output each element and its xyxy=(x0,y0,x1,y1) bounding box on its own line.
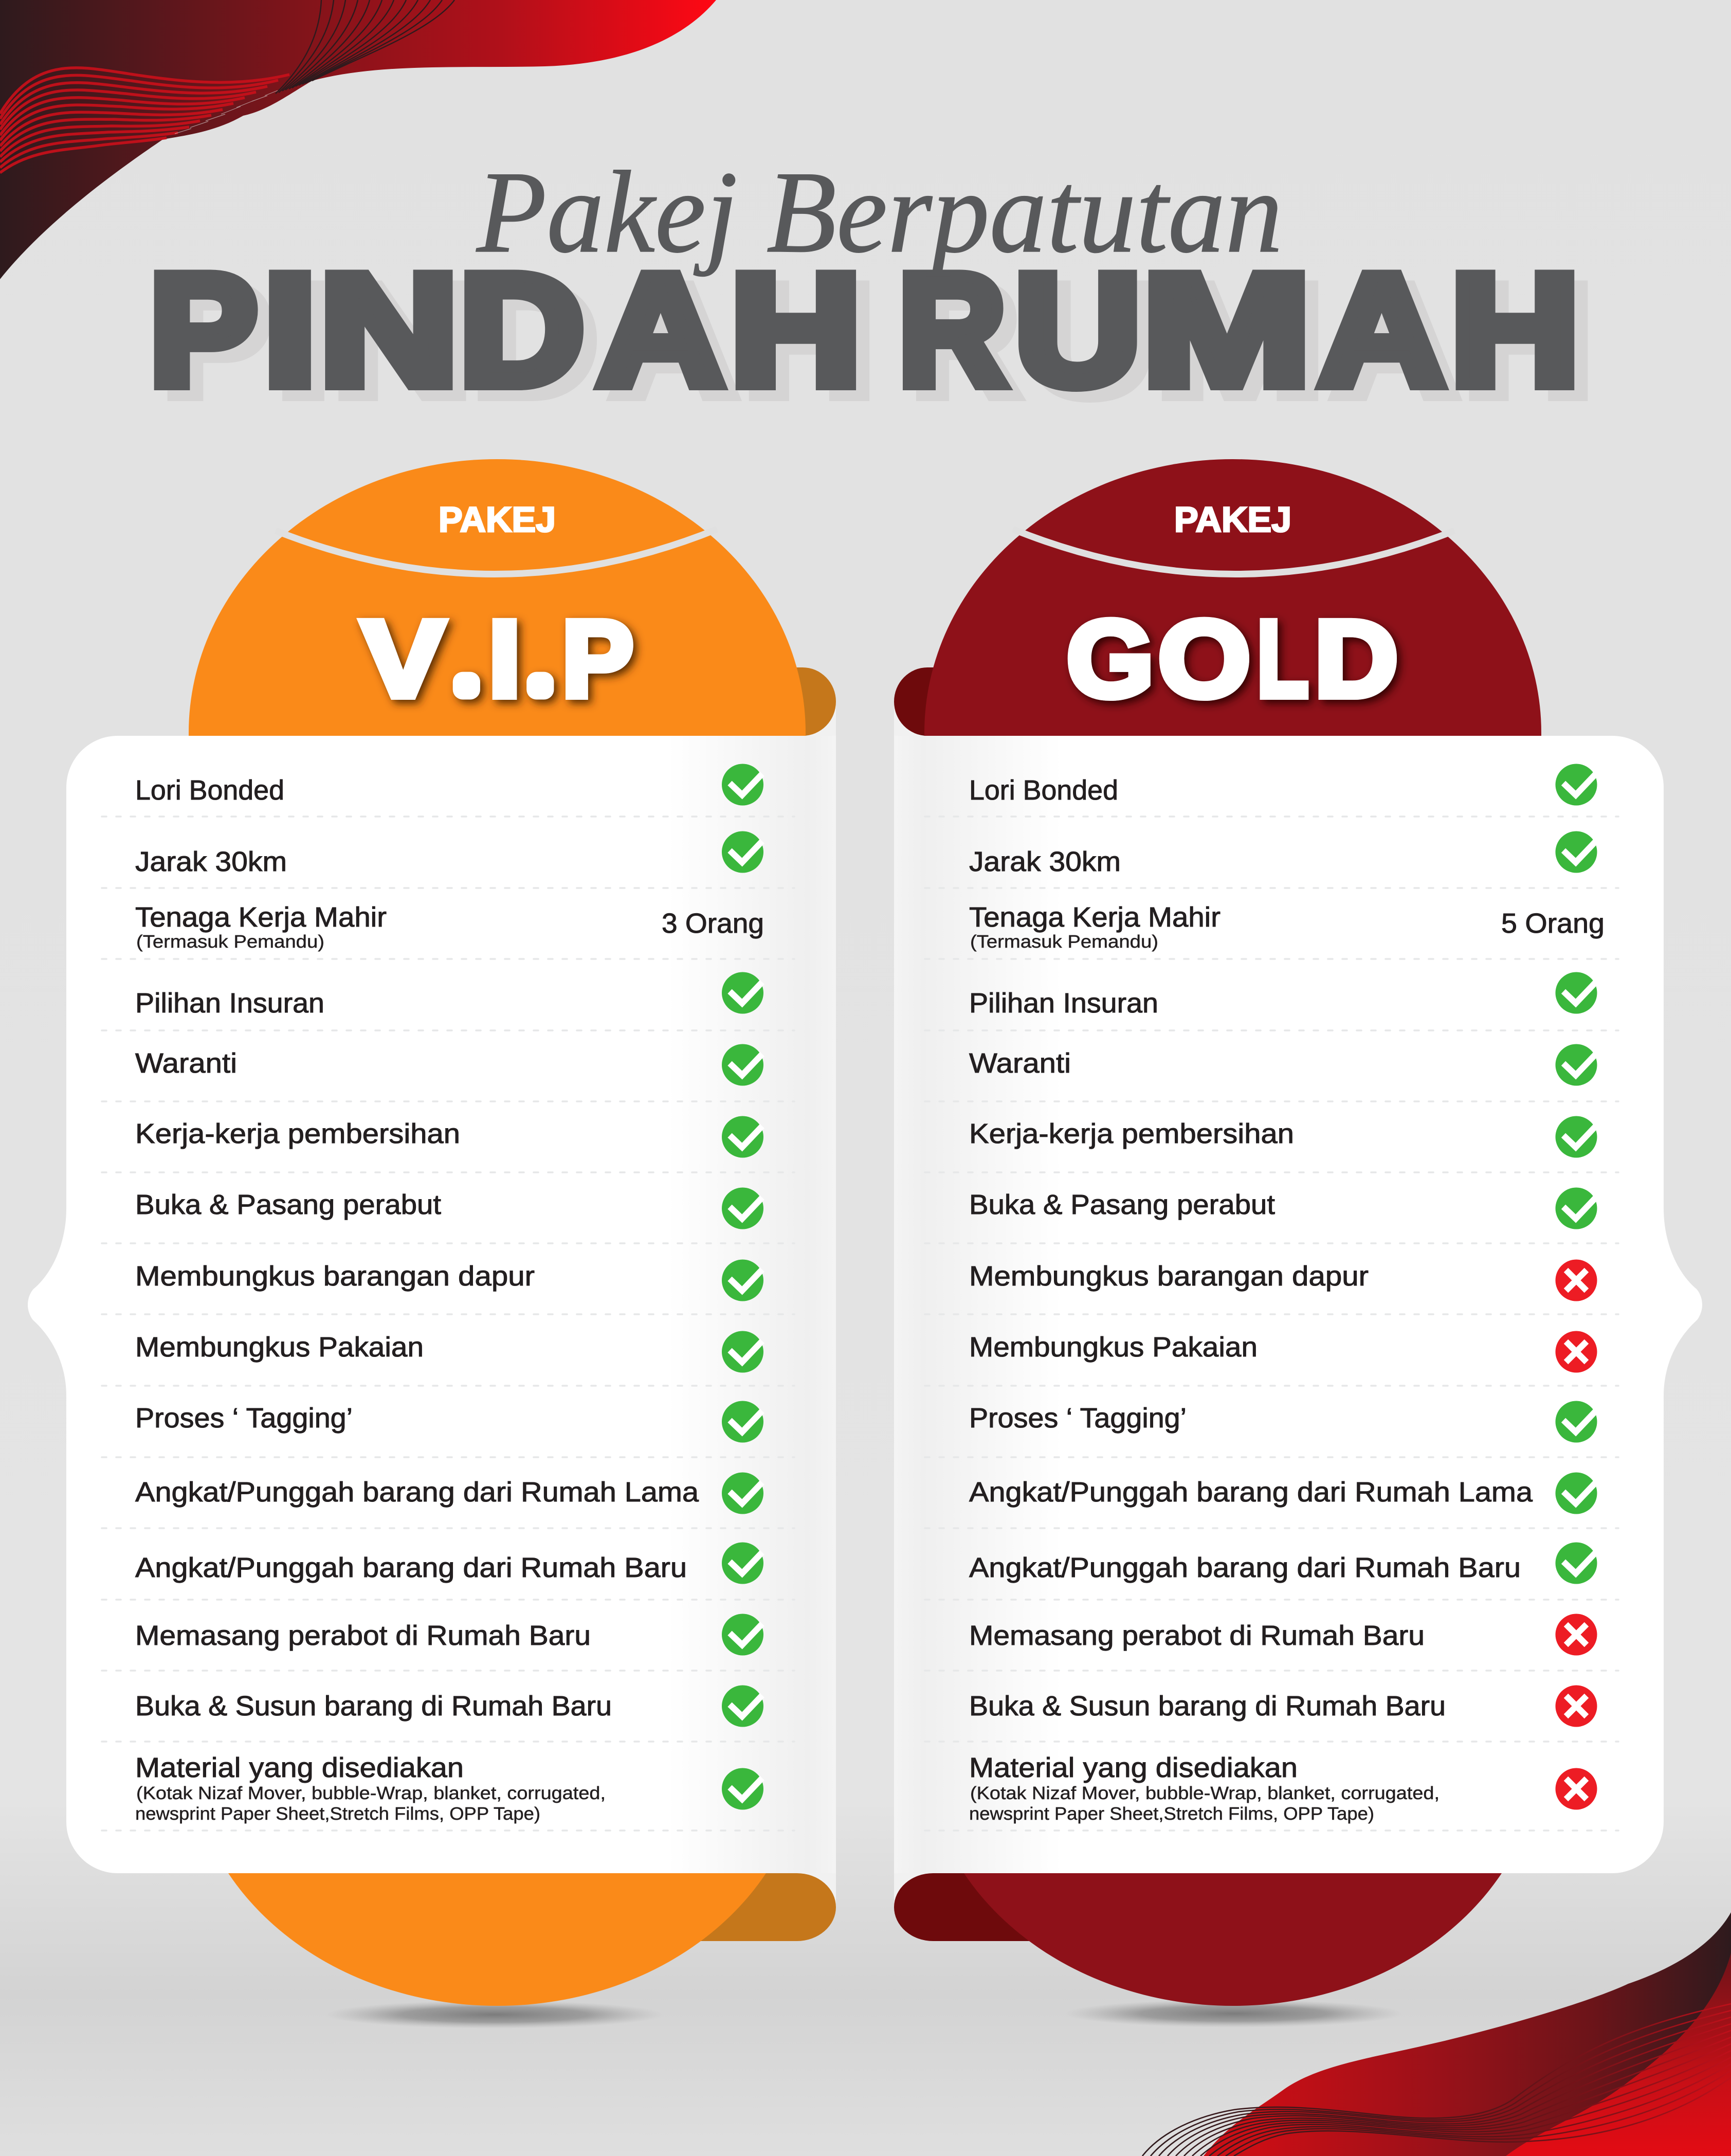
row: Membungkus barangan dapur: Membungkus barangan dapur xyxy=(135,1261,535,1292)
row: Pilihan Insuran: Pilihan Insuran xyxy=(969,988,1158,1019)
title: PINDAH RUMAH with shadow: U xyxy=(1028,252,1154,428)
row: Lori Bonded: Lori Bonded xyxy=(135,775,284,806)
title: PINDAH RUMAH with shadow: I xyxy=(264,242,316,418)
orange header cap xyxy=(189,459,806,740)
title: PINDAH RUMAH with shadow: H xyxy=(1464,252,1593,428)
row: Membungkus Pakaian xyxy=(969,1331,1597,1373)
row: Proses Tagging xyxy=(969,1401,1597,1443)
top fold sliver xyxy=(792,701,836,742)
row: Buka & Pasang perabut xyxy=(135,1188,763,1229)
title: PINDAH RUMAH with shadow: U xyxy=(1015,242,1141,418)
V.I.P heading: . xyxy=(533,643,548,701)
title: PINDAH RUMAH with shadow: R xyxy=(912,252,1019,428)
title: PINDAH RUMAH with shadow: R xyxy=(899,242,1006,418)
row: Proses Tagging: Proses ‘ Tagging’ xyxy=(969,1403,1187,1434)
row: Buka & Pasang perabut xyxy=(969,1188,1597,1229)
row: Proses Tagging: Proses ‘ Tagging’ xyxy=(135,1403,353,1434)
row: Material yang disediakan: (Kotak Nizaf Mover, bubble-Wrap, blanket, corrugated, xyxy=(136,1783,606,1803)
white list card xyxy=(28,736,836,1873)
row: Tenaga Kerja Mahir, 5 Orang xyxy=(969,902,1605,952)
row: Tenaga Kerja Mahir, 5 Orang: (Termasuk Pemandu) xyxy=(970,932,1158,952)
row: Buka & Susun barang: Buka & Susun barang di Rumah Baru xyxy=(135,1691,612,1722)
row: Jarak 30km xyxy=(969,831,1597,877)
row: Kerja-kerja pembersihan xyxy=(135,1116,763,1158)
row: Angkat/Punggah Rumah Lama xyxy=(135,1473,763,1514)
PAKEJ label: PAKEJ xyxy=(1174,500,1291,539)
mirrored panel shapes xyxy=(894,459,1702,2006)
row: Waranti: Waranti xyxy=(969,1048,1071,1079)
row: Angkat/Punggah Rumah Baru xyxy=(135,1543,763,1584)
title: PINDAH RUMAH with shadow: H xyxy=(1451,242,1579,418)
bottom fold sliver xyxy=(792,1867,836,1908)
V.I.P heading: I xyxy=(488,598,521,719)
GOLD heading: G xyxy=(1067,598,1154,719)
row: Pilihan Insuran: Pilihan Insuran xyxy=(135,988,324,1019)
row: Tenaga Kerja Mahir, 3 Orang xyxy=(135,902,764,952)
row: Tenaga Kerja Mahir, 3 Orang: 3 Orang xyxy=(662,908,764,939)
bottom folded tab xyxy=(643,1873,836,1941)
PAKEJ label: PAKEJ xyxy=(439,500,556,539)
row: Membungkus Pakaian: Membungkus Pakaian xyxy=(135,1332,424,1363)
row: Lori Bonded xyxy=(969,764,1597,806)
row: Angkat/Punggah Rumah Baru: Angkat/Punggah barang dari Rumah Baru xyxy=(969,1552,1521,1583)
row: Membungkus barangan dapur xyxy=(969,1260,1597,1301)
title: PINDAH RUMAH with shadow xyxy=(150,242,1593,428)
row: Tenaga Kerja Mahir, 5 Orang: Tenaga Kerja Mahir xyxy=(969,902,1220,933)
top folded tab xyxy=(792,667,836,736)
row: Lori Bonded xyxy=(135,764,763,806)
row: Memasang perabot: Memasang perabot di Rumah Baru xyxy=(969,1620,1425,1651)
V.I.P heading: V xyxy=(361,598,445,719)
GOLD heading: O xyxy=(1158,598,1250,719)
row: Jarak 30km: Jarak 30km xyxy=(135,846,287,877)
row: Material yang disediakan: (Kotak Nizaf Mover, bubble-Wrap, blanket, corrugated, xyxy=(970,1783,1440,1803)
row: Angkat/Punggah Rumah Baru: Angkat/Punggah barang dari Rumah Baru xyxy=(135,1552,687,1583)
title: PINDAH RUMAH with shadow: H xyxy=(731,242,861,418)
row: Tenaga Kerja Mahir, 3 Orang: (Termasuk Pemandu) xyxy=(136,932,324,952)
row: Memasang perabot xyxy=(135,1614,763,1656)
row: Buka & Pasang perabut: Buka & Pasang perabut xyxy=(135,1189,441,1220)
decoration: top-left red wave xyxy=(0,0,716,279)
row: Material yang disediakan: newsprint Paper Sheet,Stretch Films, OPP Tape) xyxy=(969,1804,1374,1824)
orange footer cap xyxy=(189,1697,806,2006)
title: PINDAH RUMAH with shadow: P xyxy=(150,242,257,418)
floor shadow xyxy=(1064,2000,1404,2027)
row: Tenaga Kerja Mahir, 5 Orang: 5 Orang xyxy=(1501,908,1605,939)
title: PINDAH RUMAH with shadow: M xyxy=(1156,252,1324,428)
GOLD heading: L xyxy=(1257,598,1308,719)
row: Material yang disediakan: newsprint Paper Sheet,Stretch Films, OPP Tape) xyxy=(135,1804,540,1824)
row: Waranti xyxy=(135,1044,763,1086)
row: Material yang disediakan xyxy=(969,1752,1597,1824)
row: Membungkus Pakaian: Membungkus Pakaian xyxy=(969,1332,1258,1363)
title: PINDAH RUMAH with shadow: A xyxy=(611,252,737,428)
row: Buka & Susun barang xyxy=(969,1686,1597,1727)
row: Material yang disediakan: Material yang disediakan xyxy=(135,1752,464,1783)
row: Waranti xyxy=(969,1044,1597,1086)
title: PINDAH RUMAH with shadow: A xyxy=(1319,242,1444,418)
row: Membungkus Pakaian xyxy=(135,1331,763,1373)
floor shadow xyxy=(325,2001,664,2028)
title: Pakej Berpatutan script: Pakej Berpatutan xyxy=(476,148,1283,277)
V.I.P heading: P xyxy=(562,598,633,719)
row: Kerja-kerja pembersihan xyxy=(969,1116,1597,1158)
row: Kerja-kerja pembersihan: Kerja-kerja pembersihan xyxy=(135,1118,460,1149)
title: PINDAH RUMAH with shadow: I xyxy=(277,252,330,428)
row: Memasang perabot xyxy=(969,1614,1597,1656)
title: PINDAH RUMAH with shadow: A xyxy=(1333,252,1457,428)
arc divider xyxy=(276,529,717,574)
decoration: bottom-right red wave xyxy=(1142,1912,1731,2156)
row: Tenaga Kerja Mahir, 3 Orang: Tenaga Kerja Mahir xyxy=(135,902,387,933)
row: Proses Tagging xyxy=(135,1401,763,1443)
title: PINDAH RUMAH with shadow: D xyxy=(460,242,584,418)
panel: GOLD package xyxy=(894,459,1702,2027)
title: PINDAH RUMAH with shadow: D xyxy=(473,252,597,428)
row: Lori Bonded: Lori Bonded xyxy=(969,775,1118,806)
row: Jarak 30km xyxy=(135,831,763,877)
row: Angkat/Punggah Rumah Baru xyxy=(969,1543,1597,1584)
panel: VIP package xyxy=(28,459,836,2028)
row: Kerja-kerja pembersihan: Kerja-kerja pembersihan xyxy=(969,1118,1294,1149)
row: Buka & Susun barang xyxy=(135,1686,763,1727)
title: PINDAH RUMAH with shadow: N xyxy=(333,252,471,428)
title: PINDAH RUMAH with shadow: M xyxy=(1143,242,1310,418)
title: PINDAH RUMAH with shadow: A xyxy=(598,242,723,418)
row: Memasang perabot: Memasang perabot di Rumah Baru xyxy=(135,1620,591,1651)
row: Material yang disediakan xyxy=(135,1752,763,1824)
row: Pilihan Insuran xyxy=(135,972,763,1019)
row: Material yang disediakan: Material yang disediakan xyxy=(969,1752,1298,1783)
row: Angkat/Punggah Rumah Lama: Angkat/Punggah barang dari Rumah Lama xyxy=(135,1477,699,1508)
title: PINDAH RUMAH with shadow: N xyxy=(320,242,458,418)
title: PINDAH RUMAH with shadow: H xyxy=(744,252,874,428)
GOLD heading: D xyxy=(1315,598,1398,719)
row: Buka & Susun barang: Buka & Susun barang di Rumah Baru xyxy=(969,1691,1446,1722)
row: Angkat/Punggah Rumah Lama: Angkat/Punggah barang dari Rumah Lama xyxy=(969,1477,1533,1508)
row: Angkat/Punggah Rumah Lama xyxy=(969,1473,1597,1514)
row: Buka & Pasang perabut: Buka & Pasang perabut xyxy=(969,1189,1275,1220)
row: Jarak 30km: Jarak 30km xyxy=(969,846,1121,877)
row: Membungkus barangan dapur xyxy=(135,1260,763,1301)
V.I.P heading: . xyxy=(460,643,473,701)
row: Pilihan Insuran xyxy=(969,972,1597,1019)
GOLD heading xyxy=(1067,598,1398,719)
V.I.P heading xyxy=(361,598,633,719)
title: PINDAH RUMAH with shadow: P xyxy=(163,252,270,428)
row: Waranti: Waranti xyxy=(135,1048,237,1079)
row: Membungkus barangan dapur: Membungkus barangan dapur xyxy=(969,1261,1369,1292)
